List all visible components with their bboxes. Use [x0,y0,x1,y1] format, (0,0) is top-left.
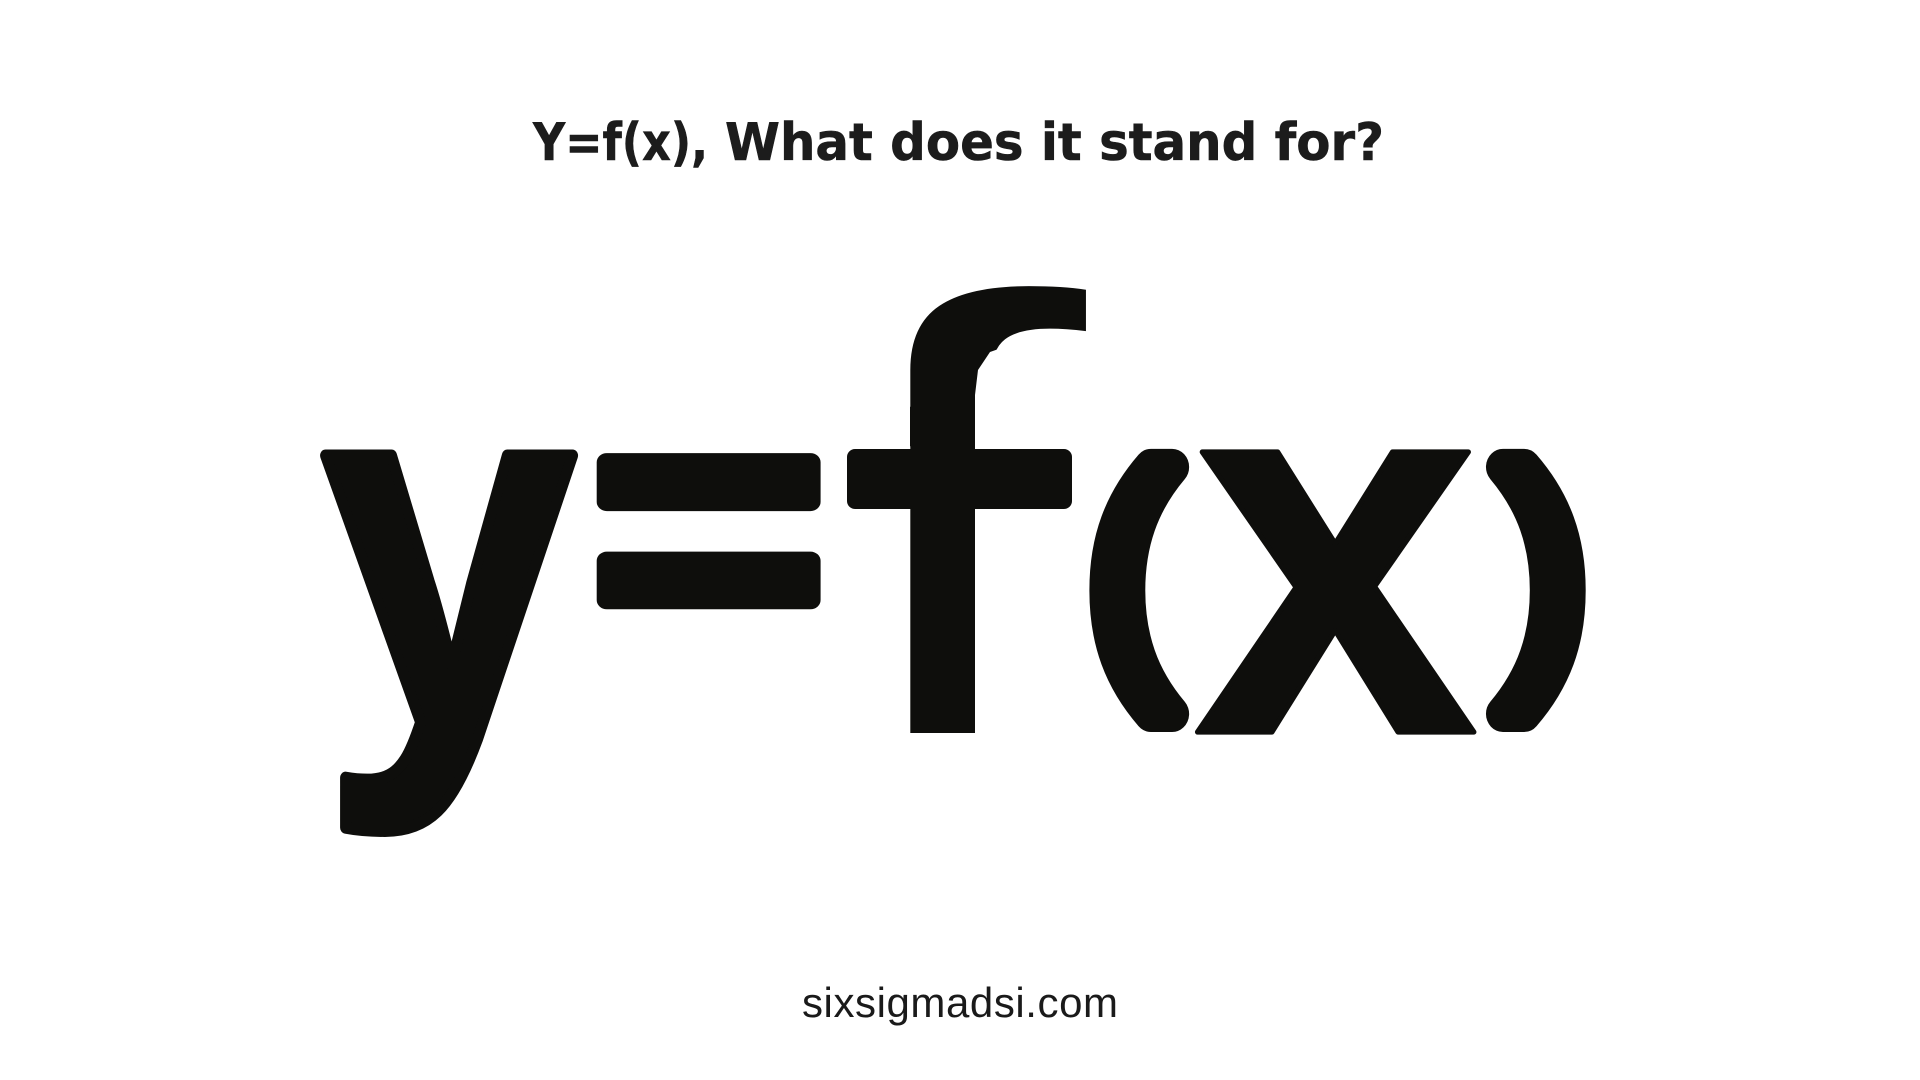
website footer: sixsigmadsi.com [802,979,1118,1026]
closing parenthesis: ) [1502,420,1584,717]
letter f [847,286,1086,733]
letter x: x [1194,253,1481,845]
letter f: f [829,175,1088,865]
formula: y=f(x) [320,286,1586,837]
equals sign: = [590,322,827,730]
title: Y=f(x), [532,113,708,173]
letter y: y [322,264,578,837]
title: What does it stand for? [725,113,1384,173]
opening parenthesis: ( [1091,420,1174,717]
